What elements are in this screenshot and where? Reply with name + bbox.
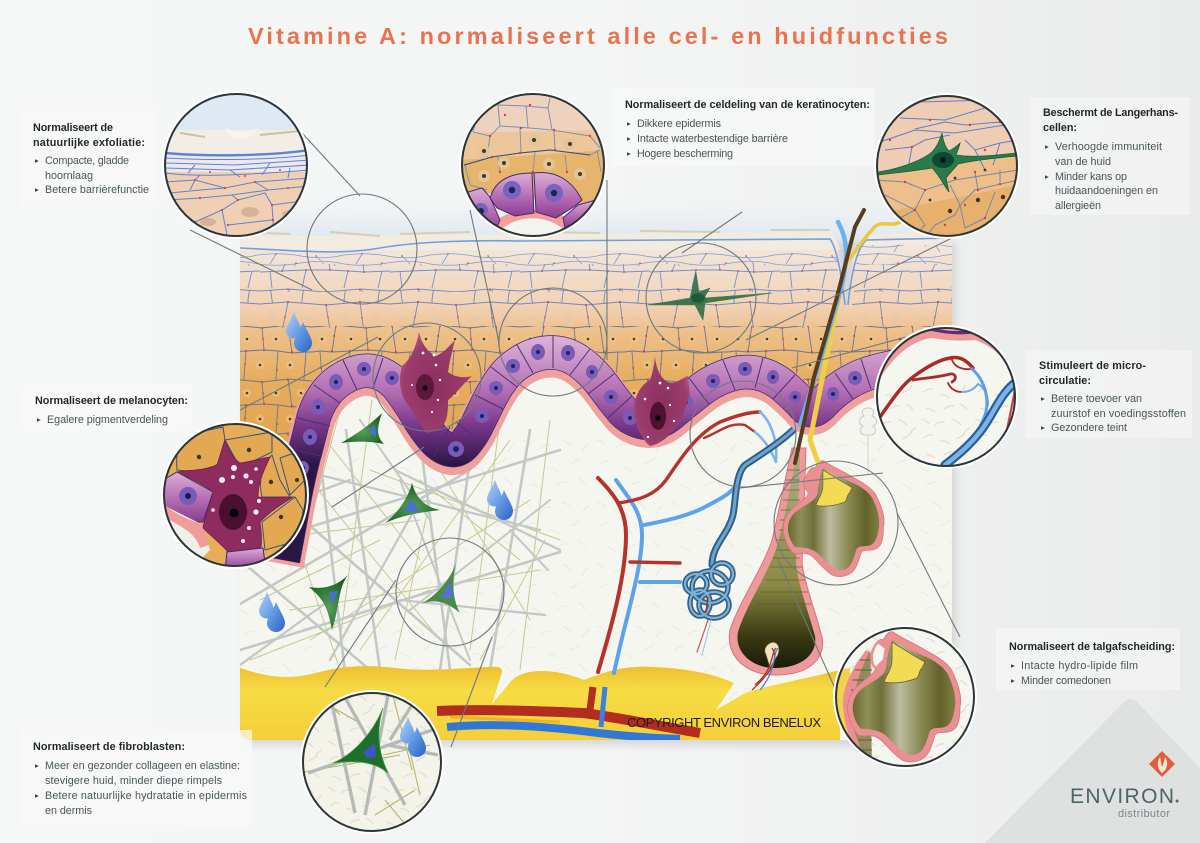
melanocyte right: [634, 356, 690, 446]
logo: Environ distributor: distributor: [1118, 808, 1170, 820]
text: Langerhans: cellen:: [1043, 122, 1077, 134]
text: talgafscheiding: [996, 628, 1180, 690]
Langerhans cell in skin: [648, 272, 772, 320]
small hair structure: [859, 408, 877, 475]
text: microcirculatie: circulatie:: [1039, 375, 1091, 387]
hair follicle: [729, 448, 823, 690]
logo corner panel: [985, 699, 1200, 843]
text: talgafscheiding: ▸: [1011, 676, 1015, 685]
text: fibroblasten: stevigere huid, minder diepe rimpels: [45, 775, 223, 787]
inset: melanocyte: [161, 421, 309, 570]
text: talgafscheiding: Normaliseert de talgafscheiding:: [1009, 641, 1175, 653]
inset: hoornlaag exfoliation: [160, 90, 312, 242]
text: microcirculatie: Gezondere teint: [1051, 422, 1127, 434]
sebaceous gland: [783, 461, 884, 577]
text: microcirculatie: ▸: [1041, 423, 1045, 432]
text: talgafscheiding: Intacte hydro-lipide film: [1021, 660, 1138, 672]
text: keratinocyten: Dikkere epidermis: [637, 118, 722, 130]
text: fibroblasten: Betere natuurlijke hydratatie in epidermis: [45, 790, 248, 802]
inset: microcirculation: [874, 320, 1018, 470]
melanocyte left: [400, 332, 472, 433]
text: natuurlijke exfoliatie: Normaliseert de: [33, 122, 113, 134]
text: talgafscheiding: Minder comedonen: [1021, 675, 1111, 687]
logo: Environ distributor: ENVIRON: [1070, 785, 1174, 808]
text: keratinocyten: Hogere bescherming: [637, 148, 733, 160]
water drops: [259, 312, 513, 632]
inset: sebaceous gland: [833, 625, 977, 770]
deep blood vessels: [437, 687, 700, 739]
text: microcirculatie: ▸: [1041, 394, 1045, 403]
text: melanocyten: [22, 385, 192, 431]
inset: keratinocytes and basal cells: [459, 90, 607, 245]
connector lines and detail circles: [190, 120, 960, 747]
text: natuurlijke exfoliatie: [20, 110, 158, 206]
inset: fibroblast: [300, 685, 444, 835]
copyright notice: COPYRIGHT ENVIRON BENELUX: [627, 715, 821, 730]
text: microcirculatie: Betere toevoer van: [1051, 393, 1142, 405]
text: fibroblasten: en dermis: [45, 805, 93, 817]
text: Langerhans: huidaandoeningen en: [1055, 185, 1158, 197]
fibroblasts in dermis: [309, 413, 460, 630]
text: fibroblasten: ▸: [35, 761, 39, 770]
text: Langerhans: Beschermt de Langerhans-: [1043, 107, 1178, 119]
text: Langerhans: Minder kans op: [1055, 171, 1127, 183]
sweat duct and coil: [685, 423, 800, 655]
collagen fibres: [240, 400, 560, 672]
text: fibroblasten: Normaliseert de fibroblasten:: [33, 741, 185, 753]
text: keratinocyten: ▸: [627, 119, 631, 128]
text: fibroblasten: [20, 730, 252, 826]
inset: Langerhans cell: [874, 93, 1020, 240]
text: keratinocyten: Intacte waterbestendige barrière: [637, 133, 788, 145]
dermis background: [240, 352, 952, 740]
logo: Environ distributor: [1070, 751, 1178, 820]
text: natuurlijke exfoliatie: ▸: [35, 156, 39, 165]
text: melanocyten: Normaliseert de melanocyten:: [35, 395, 188, 407]
fat layer: [240, 666, 840, 740]
text: melanocyten: Egalere pigmentverdeling: [47, 414, 168, 426]
text: natuurlijke exfoliatie: Compacte, gladde: [45, 155, 129, 167]
text: keratinocyten: ▸: [627, 134, 631, 143]
text: talgafscheiding: ▸: [1011, 661, 1015, 670]
text: melanocyten: ▸: [37, 415, 41, 424]
title: Vitamine A: normaliseert alle cel- en huidfuncties: [248, 23, 948, 49]
dermal vessels: [598, 412, 776, 673]
hair shaft and sebum channel: [795, 210, 900, 463]
text: Langerhans: Verhoogde immuniteit: [1055, 141, 1162, 153]
text: natuurlijke exfoliatie: Betere barrièrefunctie: [45, 184, 149, 196]
text: Langerhans: van de huid: [1055, 156, 1111, 168]
text: natuurlijke exfoliatie: hoornlaag: [45, 170, 93, 182]
text: natuurlijke exfoliatie: ▸: [35, 185, 39, 194]
text: natuurlijke exfoliatie: natuurlijke exfoliatie:: [33, 137, 145, 149]
text: Langerhans: ▸: [1045, 172, 1049, 181]
text: keratinocyten: ▸: [627, 149, 631, 158]
text: Langerhans: allergieën: [1055, 200, 1101, 212]
text: Langerhans: [1030, 97, 1190, 215]
epidermis cell layers: [240, 229, 952, 442]
text: fibroblasten: ▸: [35, 791, 39, 800]
text: microcirculatie: zuurstof en voedingsstoffen: [1051, 408, 1186, 420]
text: keratinocyten: [612, 88, 875, 166]
text: keratinocyten: Normaliseert de celdeling van de keratinocyten:: [625, 99, 870, 111]
text: fibroblasten: Meer en gezonder collageen en elastine:: [45, 760, 240, 772]
text: microcirculatie: [1026, 350, 1192, 438]
text: microcirculatie: Stimuleert de micro-: [1039, 360, 1146, 372]
basal cell layer: [283, 336, 952, 564]
text: Langerhans: ▸: [1045, 142, 1049, 151]
skin illustration panel: [240, 190, 956, 746]
